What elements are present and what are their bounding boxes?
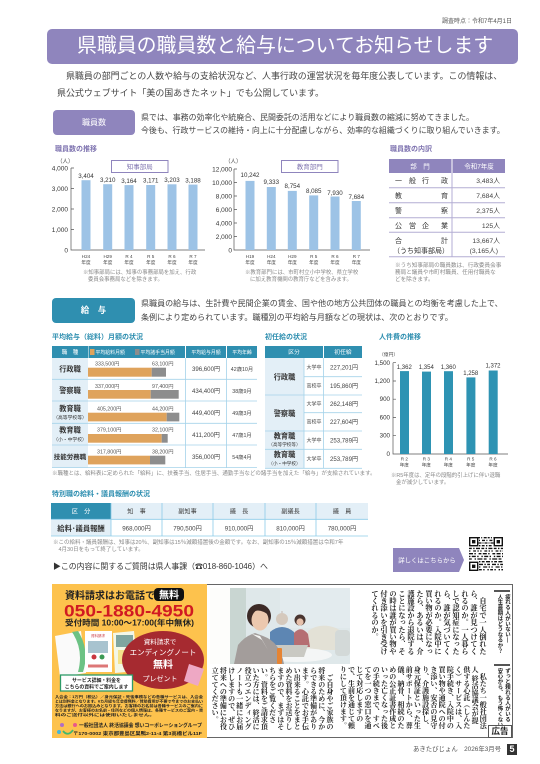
ad badge: 広告 [491,726,508,736]
ad panel: yellow phone offer: プレゼント [142,674,178,683]
table: special posts [51,503,368,536]
ad panel: yellow phone offer: 無料 [153,658,173,671]
article: consumer text, column 2: めの公正証書作成と [389,666,397,729]
table: special posts: 780,000円 [328,526,356,532]
article: consumer text, column 1: たら、あるいは、介 [416,590,424,655]
heading: average monthly pay: 平均給与（総料）月額の状況 [52,334,143,341]
table: average monthly pay with bars: 333,500円 [95,360,119,368]
bar chart: education department staff: 年度 [309,259,319,266]
table: average monthly pay with bars: 42歳10月 [231,365,253,373]
article: consumer text, column 1: れるのか。一人暮ら [461,590,469,655]
staff breakdown note: 務局と議員や市町村職員、任用付職員な [395,270,496,276]
bar chart: governor department staff: H24 [82,254,91,259]
bar chart: governor department staff: R 6 [168,254,176,259]
table: average monthly pay with bars: （小・中学校） [53,436,87,443]
bar chart: education department staff: 年度 [330,259,340,266]
table: staff breakdown: （うち知事部局） [393,246,449,255]
bar chart: personnel cost: R 4 [445,456,452,462]
ad panel: yellow phone offer: とは別料金となります。6カ月経ち年会費無料／賛助費用が不要で今までのお支払い [55,698,203,704]
staff section text: 県では、事務の効率化や統廃合、民間委託の活用などにより職員数の縮減に努めてきました。 [141,113,474,122]
bar chart: governor department staff: 年度 [124,259,134,266]
bar chart: personnel cost: 600 [380,414,391,422]
table: starting salary: 行政職 [274,372,296,382]
ad panel: yellow phone offer: 一般社団法人 終活協議会 想いコーポレーショングループ [79,721,203,729]
table: staff breakdown: 営 [409,221,416,230]
table: staff breakdown: 育 [441,191,448,200]
article: consumer text, column 2: 儀、納骨、相続のた [397,666,405,729]
bar chart: personnel cost: 金が減少しています。 [396,478,449,486]
bar chart: governor department staff [52,158,205,283]
table: special posts: 790,500円 [173,526,202,532]
footer: page number [507,744,517,755]
bar chart: governor department staff: 3,164 [121,178,137,185]
bar chart: education department staff: 12,000 [212,166,232,174]
intro text [57,71,502,98]
bar chart: education department staff: （人） [225,158,242,165]
bar chart: governor department staff: 知事部局 [127,162,153,171]
article: consumer text, column 1 [371,590,487,655]
table: average monthly pay with bars: 405,200円 [97,406,121,412]
article: consumer text, column 1: の時は誰が買い物や [389,590,397,655]
side headline text 1 [496,594,510,653]
ad panel: yellow phone offer: 無料 [159,588,179,602]
side headline text 2: 安心から、もう怖くない [496,668,502,727]
section label: salary [52,298,135,323]
ad panel: yellow phone offer: サービス詳細・料金を [72,677,121,684]
arrow button: details: 詳しくはこちらから [398,556,456,564]
bar chart: personnel cost: 1,360 [441,365,456,371]
table: staff breakdown: 7,684人 [476,193,500,200]
table: average monthly pay with bars: 平均年齢 [232,349,252,356]
heading: personnel cost: 人件費の推移 [379,334,421,341]
staff breakdown note [395,262,502,283]
bar chart: education department staff: 年度 [352,259,361,266]
bar chart: education department staff: 4,000 [216,220,232,228]
table: staff breakdown: 般 [409,176,416,185]
table: starting salary: 253,789円 [330,456,358,463]
bar chart: education department staff: 教育部門 [297,162,323,171]
article: consumer text, column 3: い。資料をご請求頂 [260,667,268,730]
bar chart: governor department staff: R 4 [125,254,133,259]
table: special posts: 区 分 [72,508,91,516]
table: staff breakdown: 計 [441,236,448,245]
special posts note [53,539,344,553]
intro text: 県公式ウェブサイト「美の国あきたネット」でも公開しています。 [57,88,324,98]
table: starting salary: （小・中学校） [268,460,301,467]
article: consumer text, column 3: 立ててください。 [211,667,219,723]
article: consumer text, column 1: ことになったら、そ [398,590,406,655]
bar chart: personnel cost: 年度 [444,462,453,468]
article: consumer text, column 3: めた資料をお送りし [285,667,293,730]
table: starting salary: 大学卒 [306,364,322,371]
bar chart: personnel cost: 年度 [422,462,431,468]
table: starting salary: 大学卒 [306,400,322,408]
article: consumer text, column 3: 役立つエンディング [244,667,252,730]
bar chart: education department staff: H24 [267,254,276,259]
bar chart: governor department staff: 年度 [167,259,177,266]
article: consumer text, column 3 [211,667,334,730]
bar chart: education department staff: 年度 [288,259,297,266]
ad panel: yellow phone offer: 資料請求 [91,633,105,638]
bar chart: education department staff: 0 [228,248,232,254]
article: consumer text, column 2: 身元保証といった生 [413,666,421,729]
bar chart: governor department staff: R 5 [147,254,155,259]
side headline 1 [494,590,510,592]
table: average monthly pay with bars: 行政職 [59,364,82,374]
table: staff breakdown: 業 [441,221,448,230]
bar chart: governor department staff: 1,000 [52,227,68,234]
table: starting salary: 警察職 [274,409,296,418]
title banner: 県職員の職員数と給与についてお知らせします [77,35,493,57]
table: starting salary: 教育職 [274,450,296,459]
article: consumer text, column 1: 付き添いを引き受け [380,590,388,655]
bar chart: education department staff: に加え教育機関の教育庁などを含みます。 [250,275,352,283]
table: starting salary: 227,201円 [330,364,358,372]
intro text: 県職員の部門ごとの人数や給与の支給状況など、人事行政の運営状況を毎年度公表しています。この情報は、 [66,71,502,81]
side headline text 1: 疲れる人がいない― [504,594,510,643]
bar chart: governor department staff: 3,404 [78,173,94,180]
special posts note: ※この給料・議員報酬は、知事は20％、副知事は15％減額措置後の金額です。なお、副知事の15％減額措置は令和7年 [53,540,343,546]
bar chart: personnel cost: 300 [380,432,391,440]
article: consumer text, column 3: けしますので、ぜひ [228,667,236,730]
staff section text [141,113,505,135]
bar chart: personnel cost: R 5 [467,456,475,462]
bar chart: education department staff: 8,085 [306,188,322,195]
table: average monthly pay with bars: 97,400円 [152,383,174,390]
table: starting salary: 教育職 [274,432,296,440]
bar chart: personnel cost: 0 [387,451,391,458]
bar chart: education department staff: H29 [288,254,297,259]
bar chart: education department staff: 年度 [267,259,276,266]
article: consumer text, column 2: 前サポートから、葬 [405,666,413,729]
bar chart: personnel cost [374,351,508,486]
table: staff breakdown: 警 [395,206,402,215]
pay table note: ※職種とは、給料表に定められた「給料」に、扶養手当、住居手当、通勤手当などの諸手当を加えた「給与」が支給されています。 [52,471,376,477]
bar chart: personnel cost: 1,354 [419,365,434,371]
advertisement frame [52,584,513,738]
section label: salary: 給 与 [81,305,106,315]
bar chart: governor department staff: 3,203 [164,177,180,184]
table: average monthly pay with bars: 356,000円 [192,454,220,461]
table: special posts: 968,000円 [122,526,151,532]
table: special posts: 議 員 [333,508,351,516]
table: staff breakdown: 察 [441,206,448,215]
table: starting salary: 区分 [288,348,300,356]
table: special posts: 910,000円 [225,526,253,532]
bar chart: governor department staff: ※知事部局には、知事の事務部局を加え、行政 [83,268,197,276]
photo: consultant and senior couple [230,588,350,664]
bar chart: governor department staff: 0 [64,248,68,254]
table: staff breakdown: 2,375人 [476,208,500,215]
table: starting salary: 初任給 [334,348,352,356]
bar chart: governor department staff: 3,188 [185,178,201,184]
article: consumer text, column 1: 護施設から退院する [407,590,415,655]
heading: starting salary: 初任給の状況 [265,334,307,341]
table: average monthly pay with bars: 44,200円 [152,406,174,412]
table: staff breakdown: 行 [422,176,429,185]
table: average monthly pay with bars: 49歳3月 [232,409,252,417]
bar chart: governor department staff: 年度 [146,259,156,266]
bar chart: education department staff: R 7 [353,254,360,259]
article: consumer text, column 1: れるのか。入院中に [434,590,442,655]
bar chart: governor department staff: 3,210 [100,177,116,184]
salary section text [141,299,503,322]
table: starting salary [265,346,362,469]
bar chart: personnel cost: 1,200 [375,378,391,385]
table: average monthly pay with bars: 449,400円 [192,410,220,417]
table: special posts: 副知事 [178,508,197,516]
bar chart: personnel cost: 年度 [488,462,498,468]
table: staff breakdown [389,159,505,258]
bar chart: governor department staff: H29 [103,254,112,259]
bar chart: education department staff: 10,242 [241,172,260,179]
bar chart: education department staff: 6,000 [216,207,232,214]
bar chart: education department staff: R 6 [331,254,339,259]
ad panel: yellow phone offer: エンディングノート [130,647,196,657]
table: starting salary: 大学卒 [306,456,322,462]
article: consumer text, column 3: ますので、まずはそ [277,667,285,730]
table: average monthly pay with bars: （高等学校等） [53,414,87,421]
article: consumer text, column 2: き添い、安否の見守 [430,666,438,729]
heading: special posts: 特別職の給料・議員報酬の状況 [52,491,150,498]
table: average monthly pay with bars: 32,100円 [152,426,174,434]
table: starting salary: 253,789円 [330,438,358,444]
table: special posts: 副議長 [281,508,300,516]
bar chart: personnel cost: R 2 [401,456,408,462]
QR code [469,537,503,571]
article: consumer text, column 2: 院手続き、入院中の [446,666,454,729]
ad panel: yellow phone offer: 料のご送付以外には使用いたしません。 [55,712,155,717]
bar chart: governor department staff: R 7 [189,254,197,259]
bar chart: education department staff: R 5 [310,254,318,259]
table: starting salary: 高校卒 [306,418,322,426]
article: consumer text, column 1: しで認知症になった [452,590,460,655]
table: starting salary: 大学卒 [306,437,322,444]
table: staff breakdown: 3,483人 [476,178,500,185]
article: consumer text, column 3: 将来のために、今か [318,667,326,730]
bar chart: governor department staff: 年度 [103,259,113,266]
table: average monthly pay with bars: 平均諸手当月額 [140,349,175,356]
bar chart: education department staff: 7,684 [349,194,365,201]
table: starting salary: 高校卒 [306,382,322,390]
article: consumer text, column 2: りにして頂けます。 [339,666,347,729]
special posts note: 4月30日をもって終了しています。 [58,547,144,553]
section label: staff count [53,110,135,135]
article: consumer text, column 3: ノートも一緒にお届 [236,667,244,730]
article: consumer text, column 3: いた方には、終活に [252,667,260,730]
table: staff breakdown: 125人 [482,223,500,230]
ad panel: yellow phone offer: 方法は銀行へのお振込みとなります。お客様のお名前は各種サービスのご案内に [55,703,203,708]
table: staff breakdown: 企 [422,221,429,230]
ad panel: yellow phone offer: 入会金：1万円（税込）／身元保証・死後事務などの各種サービスは、入会金 [55,694,203,699]
footer: issue name: あきたびじょん 2026年3月号 [413,746,501,753]
side headline 2 [494,664,510,666]
table: average monthly pay with bars: 技能労務職 [54,452,87,461]
bar chart: personnel cost: 1,500 [375,360,391,367]
table: average monthly pay with bars: 396,600円 [192,366,220,373]
ad panel: yellow phone offer [52,584,207,738]
section label: staff count: 職員数 [82,118,106,127]
article: consumer text, column 2: じて対応しますの [356,666,364,722]
bar chart: education department staff: 9,333 [264,179,280,186]
table: average monthly pay with bars: 教育職 [59,426,82,434]
table: staff breakdown: 13,667人 [472,238,500,245]
table: starting salary: （高等学校等） [268,441,301,448]
article: consumer text, column 2: いった亡くなった後 [380,666,388,729]
heading: staff breakdown: 職員数の内訳 [390,146,432,153]
bar chart: education department staff: 8,754 [285,183,301,190]
ad panel: yellow phone offer: 受付時間 10:00～17:00(年中無休) [65,618,194,628]
table: special posts: 知 事 [127,508,146,516]
table: staff breakdown: 教 [395,191,402,200]
bar chart: education department staff: ※教育部門には、市町村立小中学校、県立学校 [245,268,359,276]
article: consumer text, column 2: てを一つの窓口を通 [364,666,372,729]
table: average monthly pay with bars [52,346,257,468]
table: average monthly pay with bars: 63,100円 [152,360,174,368]
table: starting salary: 195,860円 [330,383,358,390]
bar chart: personnel cost: 1,372 [485,364,501,370]
article: consumer text, column 3: い出来ることをまと [293,667,301,730]
title banner [47,29,518,64]
table: starting salary: 262,148円 [330,401,358,408]
table: staff breakdown: (3,165人) [470,248,498,255]
table: average monthly pay with bars: 337,000円 [95,383,119,390]
table: special posts: 給料･議員報酬 [57,524,105,533]
staff breakdown note: どを除きます。 [395,277,434,283]
bar chart: personnel cost: 年度 [400,462,409,468]
table: staff breakdown: 合 [395,236,402,245]
heading: staff trend: 職員数の推移 [55,146,97,153]
article: consumer text, column 3: 将来への準備にお役 [219,667,227,730]
article: consumer text, column 2 [339,666,487,729]
bar chart: governor department staff: 年度 [188,259,198,266]
table: average monthly pay with bars: 54歳4月 [232,453,252,461]
table: special posts: 810,000円 [276,526,305,532]
footer: page number: 5 [509,744,514,754]
side headline text 2 [496,668,510,727]
bar chart: education department staff: H19 [246,254,255,259]
bar chart: education department staff: 年度 [245,259,255,266]
ad panel: yellow phone offer: こちらの資料でご案内します [65,684,128,690]
staff breakdown note: ※うち知事部局の職員数は、行政委員会事 [395,263,501,269]
bar chart: personnel cost: 年度 [466,462,476,468]
bar chart: education department staff [212,158,370,283]
bar chart: governor department staff: 4,000 [52,166,68,172]
bar chart: personnel cost: ※R5年度は、定年の段階的引上げに伴い退職 [391,471,501,479]
article: consumer text, column 1: ら、誰が気づいてく [443,590,451,655]
table: staff breakdown: 政 [441,176,448,185]
bar chart: governor department staff: 3,171 [143,178,159,184]
table: special posts: 議 長 [230,508,248,516]
article: consumer text, column 1: てくれるのか。 [371,590,379,640]
article: consumer text, column 3: ます。心託でお手伝 [301,667,309,730]
bar chart: personnel cost: 1,362 [397,365,412,371]
table: average monthly pay with bars: 平均給料月額 [96,349,125,356]
ad panel: yellow phone offer: 資料請求で [144,637,177,646]
bar chart: education department staff: 2,000 [216,234,232,241]
bar chart: education department staff: 8,000 [216,194,232,200]
article: consumer text, column 2: で、生前を通じて頼 [348,666,356,729]
table: average monthly pay with bars: 38,200円 [152,448,174,456]
article: consumer text, column 2: の手続きまで、すべ [372,666,380,729]
table: starting salary: 227,604円 [330,419,358,426]
arrow button: details [393,548,464,572]
article: consumer text, column 1: 自宅で一人倒れた [479,597,487,655]
ad badge [488,725,512,738]
bar chart: personnel cost: R 6 [489,456,497,462]
bar chart: governor department staff: 2,000 [52,206,68,214]
table: average monthly pay with bars: 379,100円 [97,426,121,434]
table: staff breakdown: 令和7年度 [464,162,494,170]
table: average monthly pay with bars: 38歳9月 [232,387,252,395]
article: consumer text, column 1: 買い物が必要になっ [425,590,433,655]
table: average monthly pay with bars: 411,200円 [192,432,220,439]
bar chart: governor department staff: 委員会事務局などを除きます。 [88,275,163,283]
staff section text: 今後も、行政サービスの維持・向上に十分配慮しながら、効率的な組織づくりに取り組んでいきます。 [141,126,505,135]
article: consumer text, column 3: ちらをご覧くださ [269,667,277,723]
article: consumer text, column 2: 供する心託（しんた [463,666,471,729]
table: average monthly pay with bars: 警察職 [59,386,82,395]
table: average monthly pay with bars: 317,800円 [97,448,121,456]
bar chart: personnel cost: （億円） [379,351,398,358]
bar chart: education department staff: 10,000 [212,180,232,187]
article: consumer text, column 2: 人 終活協議会が提 [471,666,479,724]
bar chart: education department staff: 7,930 [327,190,343,197]
article: consumer text, column 2: 買い物や通院への付 [438,666,446,729]
article: consumer text, column 2: 私たち一般社団法 [479,673,487,729]
article: consumer text, column 1: ら、誰が見つけてく [470,590,478,655]
table: average monthly pay with bars: 47歳1月 [232,431,252,439]
table: average monthly pay with bars: 434,400円 [192,388,220,395]
bar chart: governor department staff: （人） [57,158,74,165]
table: average monthly pay with bars: 平均給与月額 [191,349,221,356]
contact line: ▶この内容に関するご質問は県人事課（☎018-860-1046）へ [53,562,268,571]
ad panel: yellow phone offer: 〒170-0002 東京都豊島区巣鴨2-11-4 第3高橋ビル11F [73,730,202,737]
ad panel: yellow phone offer: 050-1880-4950 [64,602,194,620]
article: consumer text, column 3: らできる準備があり [310,667,318,730]
bar chart: personnel cost: R 3 [423,456,430,462]
ad panel: yellow phone offer: 資料請求はお電話で [65,589,155,602]
bar chart: personnel cost: 900 [380,396,391,403]
side headline text 1: 人生最期はどうなるか？ [496,594,502,653]
bar chart: personnel cost: 1,258 [463,371,479,377]
bar chart: governor department staff: 年度 [81,259,91,266]
table: average monthly pay with bars: 教育職 [59,404,82,413]
table: average monthly pay with bars: 職 種 [62,348,79,356]
salary section text: 県職員の給与は、生計費や民間企業の賃金、国や他の地方公共団体の職員との均衡を考慮した上で、 [141,299,503,308]
bar chart: governor department staff: 3,000 [52,186,68,193]
table: staff breakdown: 部 門 [410,162,430,170]
survey date: 調査時点：令和7年4月1日 [442,19,512,25]
side headline text 2: ずっと頼れる人がいる [504,668,510,722]
table: staff breakdown: 公 [395,222,402,230]
table: staff breakdown: 一 [395,178,402,185]
ad panel: yellow phone offer: なりますが、お客様のお名前・住所などの個人情報は、各種サービスのご案内・資 [55,708,203,712]
article: consumer text, column 2: り、介護施設探し、 [422,666,430,729]
article: consumer text, column 3: ご自身やご家族の [326,674,334,730]
salary section text: 条例により定められています。職種別の平均給与月額などの現状は、次のとおりです。 [141,313,453,322]
article: consumer text, column 2: く）サービスは、入 [455,666,463,729]
